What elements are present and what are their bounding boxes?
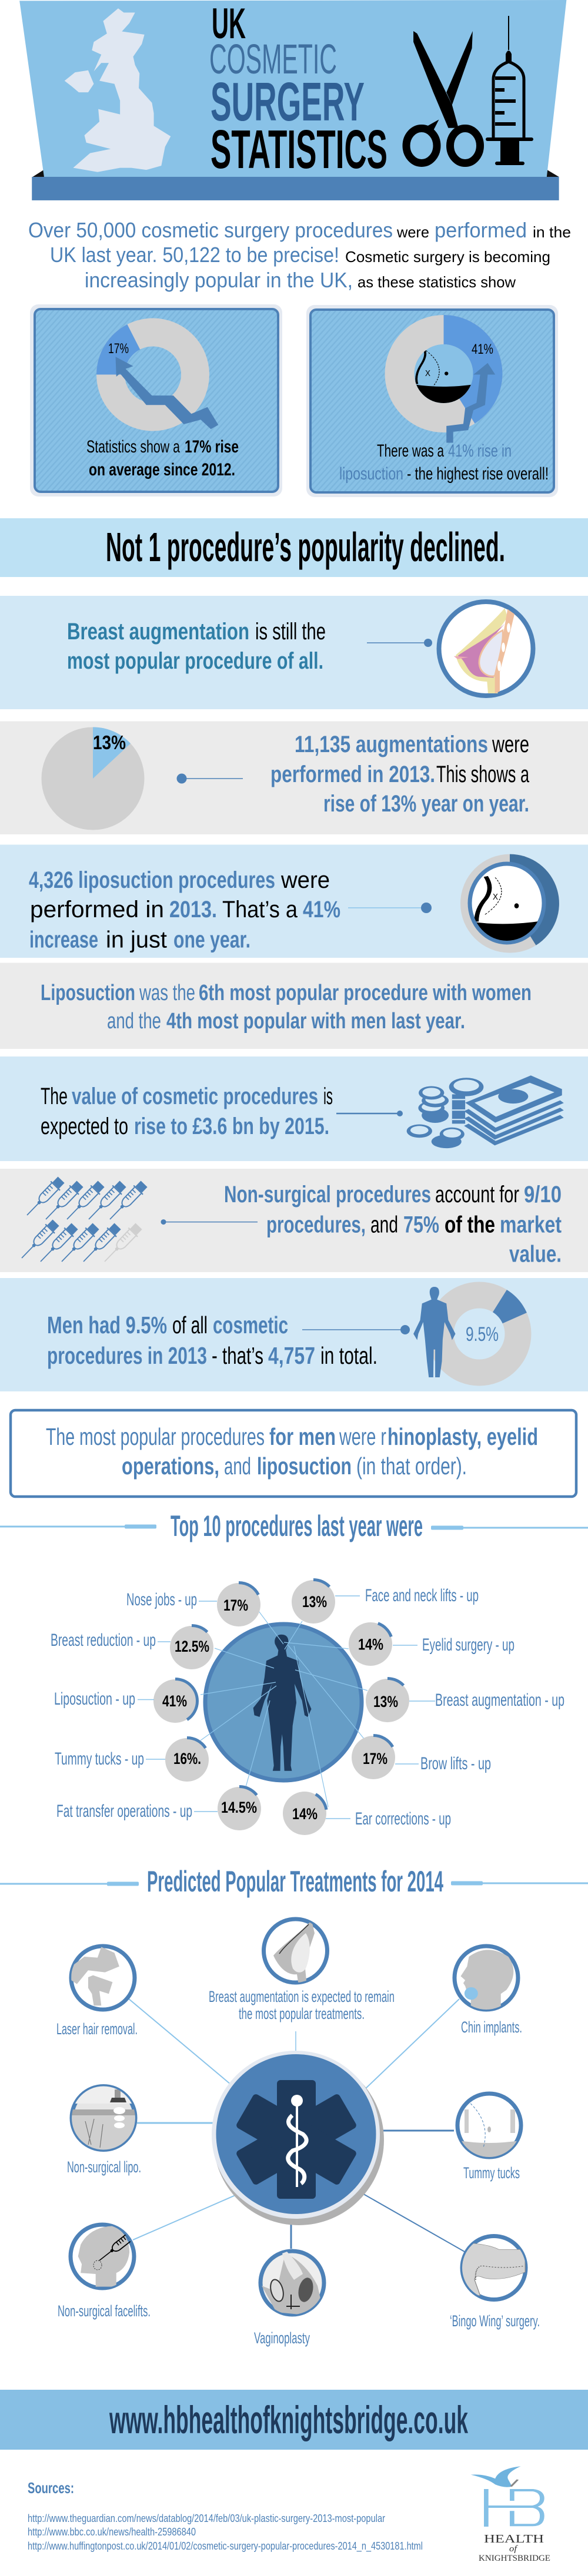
stat: breast reduction	[51, 1625, 214, 1670]
stat: tummy tucks: 16%.	[173, 1750, 201, 1767]
intro text: UK last year. 50,122 to be precise!	[50, 243, 339, 267]
stat: brow lifts: Brow lifts - up	[420, 1754, 491, 1773]
panel: liposuction rank: was the	[139, 981, 195, 1005]
panel: liposuction rank: Liposuction	[41, 981, 135, 1005]
callout: popular procedures for men: liposuction	[257, 1453, 352, 1480]
callout: popular procedures for men: (in that order).	[356, 1453, 467, 1480]
stat: breast augmentation	[366, 1678, 564, 1723]
text: 2013.	[169, 897, 217, 923]
text	[41, 1084, 333, 1139]
title: UK	[212, 0, 246, 48]
stat: nose jobs: Nose jobs - up	[126, 1590, 197, 1609]
connector	[302, 1325, 410, 1334]
stat: liposuction: Liposuction - up	[54, 1689, 135, 1709]
intro text	[28, 218, 571, 292]
caption: on average since 2012.	[89, 460, 235, 479]
stat: brow lifts: 17%	[363, 1750, 387, 1767]
diagram: predicted treatments	[56, 1919, 540, 2347]
sources: http://www.huffingtonpost.co.uk/2014/01/02/cosmetic-surgery-popular-procedures-2014_n_4530181.html	[28, 2540, 423, 2552]
icon: ten syringes	[17, 1175, 149, 1266]
stat: ear corrections: Ear corrections - up	[355, 1809, 451, 1829]
stat: tummy tucks: Tummy tucks - up	[55, 1749, 144, 1769]
icon: dove and HB monogram	[471, 2466, 542, 2527]
sources: Sources:	[28, 2479, 74, 2497]
text: Breast augmentation	[67, 619, 249, 645]
treatment: vaginoplasty: Vaginoplasty	[254, 2329, 310, 2347]
text: of the	[445, 1212, 495, 1237]
arrow: rising trend	[116, 357, 218, 429]
text: were	[280, 867, 330, 893]
icon: breast implant diagram	[439, 602, 533, 696]
stat: nose jobs	[126, 1583, 261, 1626]
caption: There was a	[377, 441, 444, 461]
text: Men had 9.5%	[47, 1312, 167, 1339]
stat: breast reduction: Breast reduction - up	[51, 1631, 156, 1650]
donut chart with torso icon: X	[493, 892, 498, 902]
text: 4,757	[268, 1342, 315, 1369]
text	[47, 1312, 377, 1369]
title	[209, 0, 387, 180]
icon: male silhouette	[413, 1287, 456, 1377]
stat: fat transfer: Fat transfer operations - up	[56, 1802, 192, 1821]
stat: breast augmentation: 13%	[373, 1693, 398, 1710]
text: rise to £3.6 bn by 2015.	[134, 1113, 329, 1139]
panel: 4,326 liposuction	[0, 845, 588, 958]
text: increase	[29, 927, 98, 953]
intro text: performed	[435, 218, 527, 242]
label: 17%: 17%	[108, 341, 129, 357]
text	[270, 732, 530, 817]
panel: liposuction rank	[0, 963, 588, 1049]
chart: top 10 procedures	[51, 1579, 564, 1843]
icon: torso: X	[425, 368, 430, 378]
header banner	[19, 0, 566, 200]
donut chart: 41%	[400, 315, 503, 424]
stat: face and neck lifts: Face and neck lifts - up	[365, 1586, 479, 1605]
caption	[339, 441, 549, 484]
title: SURGERY	[211, 71, 365, 132]
text: and	[370, 1212, 398, 1237]
logo: Health of Knightsbridge: KNIGHTSBRIDGE	[479, 2554, 550, 2563]
footer band: website	[0, 2390, 588, 2450]
text: one year.	[173, 927, 250, 953]
panel: 17% rise	[30, 304, 282, 497]
caption: 17% rise	[185, 437, 239, 457]
panel: liposuction rank: and the	[107, 1009, 161, 1034]
text	[224, 1182, 562, 1267]
text: performed in 2013.	[270, 762, 435, 787]
intro text: in the	[533, 223, 571, 241]
intro text: were	[396, 223, 429, 241]
donut chart: 9.5%: 9.5%	[466, 1323, 499, 1346]
intro text: increasingly popular in the UK,	[85, 268, 353, 292]
stat: brow lifts	[352, 1736, 491, 1779]
stat: breast reduction: 12.5%	[175, 1638, 209, 1655]
treatment: breast augmentation: the most popular treatments.	[239, 2005, 365, 2022]
intro text: Cosmetic surgery is becoming	[345, 248, 550, 266]
stat: ear corrections: 14%	[292, 1805, 318, 1823]
treatment: chin implants	[455, 1946, 522, 2036]
text: That’s a	[222, 897, 298, 923]
stat: tummy tucks	[55, 1738, 209, 1782]
text: account for	[435, 1182, 519, 1208]
text: is still the	[255, 619, 326, 645]
callout: popular procedures for men	[11, 1410, 576, 1497]
intro text: as these statistics show	[358, 273, 516, 291]
sources	[28, 2479, 423, 2552]
text: is	[323, 1084, 333, 1109]
panel: liposuction rank: 4th most popular with men last year.	[166, 1009, 465, 1034]
treatment: bingo wing surgery	[450, 2236, 540, 2330]
callout: popular procedures for men: operations,	[122, 1453, 219, 1480]
text: 11,135 augmentations	[295, 732, 488, 757]
panel: non-surgical procedures	[0, 1169, 588, 1272]
stat: ear corrections	[275, 1783, 451, 1843]
treatment: vaginoplasty	[254, 2251, 324, 2347]
treatment: laser hair removal	[56, 1946, 138, 2038]
banner bar and corners	[19, 0, 566, 200]
text: The	[41, 1084, 68, 1109]
callout: popular procedures for men: were r	[339, 1423, 386, 1450]
text: cosmetic	[213, 1312, 288, 1339]
callout: popular procedures for men: The most popular procedures	[46, 1423, 265, 1450]
pie chart: 13%	[41, 727, 145, 830]
heading band: not 1 procedure declined	[0, 518, 588, 577]
stat: face and neck lifts	[292, 1579, 479, 1624]
caption: Statistics show a	[86, 437, 180, 457]
donut chart with torso icon	[460, 854, 559, 955]
text: This shows a	[436, 762, 530, 787]
text: 4,326 liposuction procedures	[29, 867, 275, 893]
text: of all	[172, 1312, 208, 1339]
text: most popular procedure of all.	[67, 648, 323, 674]
stat: eyelid surgery: Eyelid surgery - up	[422, 1635, 514, 1655]
text: performed in	[30, 897, 164, 923]
donut chart: 9.5%	[440, 1290, 527, 1373]
intro text: Over 50,000 cosmetic surgery procedures	[28, 218, 393, 242]
text: market	[500, 1212, 562, 1237]
callout: popular procedures for men: and	[224, 1453, 251, 1480]
stat: fat transfer	[56, 1786, 261, 1831]
icon: scissors	[406, 31, 480, 163]
donut chart: 17%	[96, 324, 195, 417]
panel: 41% rise	[306, 305, 558, 497]
icon: torso	[414, 344, 473, 403]
text: 75%	[403, 1212, 439, 1237]
text: value of cosmetic procedures	[72, 1084, 318, 1109]
connector	[161, 1219, 258, 1225]
panel: breast augmentation	[0, 596, 588, 709]
stat: nose jobs: 17%	[223, 1596, 248, 1614]
icon: UK map	[65, 8, 171, 172]
text: 41%	[303, 897, 340, 923]
text: procedures in 2013	[47, 1342, 207, 1369]
icon: money	[407, 1075, 562, 1148]
central medical star emblem	[212, 2051, 384, 2225]
text: in just	[106, 927, 167, 953]
treatment: non-surgical lipo: Non-surgical lipo.	[67, 2158, 141, 2176]
treatment: laser hair removal: Laser hair removal.	[56, 2020, 138, 2038]
logo: Health of Knightsbridge	[471, 2466, 550, 2563]
logo: Health of Knightsbridge: of	[509, 2544, 518, 2554]
connector lines	[128, 1998, 465, 2252]
panel: 11,135 augmentations	[0, 722, 588, 834]
stat: eyelid surgery: 14%	[358, 1636, 383, 1653]
text: value.	[509, 1241, 562, 1267]
sources: http://www.theguardian.com/news/datablog/2014/feb/03/uk-plastic-surgery-2013-most-popular	[28, 2513, 385, 2524]
text: were	[492, 732, 529, 757]
text: 9/10	[524, 1182, 562, 1208]
label: 41%: 41%	[472, 341, 493, 357]
treatment: non-surgical facelifts: Non-surgical facelifts.	[58, 2302, 151, 2320]
stat: face and neck lifts: 13%	[302, 1593, 327, 1611]
caption: liposuction	[339, 464, 403, 484]
treatment: non-surgical facelifts	[58, 2225, 151, 2320]
treatment: non-surgical lipo	[67, 2086, 141, 2176]
title: STATISTICS	[211, 119, 387, 180]
text: - that’s	[212, 1342, 263, 1369]
callout: popular procedures for men: for men	[269, 1423, 336, 1450]
stat: eyelid surgery	[342, 1616, 514, 1672]
text: in total.	[320, 1342, 377, 1369]
text: procedures,	[266, 1212, 366, 1237]
text: expected to	[41, 1113, 128, 1139]
icon: syringe	[486, 16, 533, 165]
stat: liposuction: 41%	[162, 1692, 187, 1710]
caption	[86, 437, 239, 479]
sources: http://www.bbc.co.uk/news/health-25986840	[28, 2526, 196, 2538]
treatment: tummy tucks	[456, 2094, 523, 2182]
stat: liposuction	[54, 1679, 198, 1723]
connector	[367, 639, 432, 647]
caption: 41% rise in	[448, 441, 512, 461]
central body circle	[205, 1624, 362, 1780]
treatment: chin implants: Chin implants.	[461, 2018, 522, 2036]
text	[29, 867, 340, 953]
arrow: rising trend	[446, 363, 495, 442]
leader lines	[201, 1611, 368, 1807]
title: COSMETIC	[209, 36, 337, 83]
connector	[348, 903, 432, 913]
text: Non-surgical procedures	[224, 1182, 431, 1208]
stat: fat transfer: 14.5%	[221, 1799, 257, 1816]
text	[67, 619, 326, 674]
callout: popular procedures for men: hinoplasty, eyelid	[387, 1423, 538, 1450]
logo: Health of Knightsbridge: HEALTH	[484, 2533, 544, 2545]
connector	[336, 1111, 403, 1116]
connector	[176, 773, 243, 784]
treatment: breast augmentation: Breast augmentation is expected to remain	[209, 1988, 395, 2005]
panel: market value	[0, 1056, 588, 1161]
panel: men share	[0, 1278, 588, 1391]
pie chart: 13%: 13%	[93, 732, 126, 753]
treatment: tummy tucks: Tummy tucks	[463, 2164, 520, 2182]
treatment: breast augmentation	[209, 1919, 395, 2022]
